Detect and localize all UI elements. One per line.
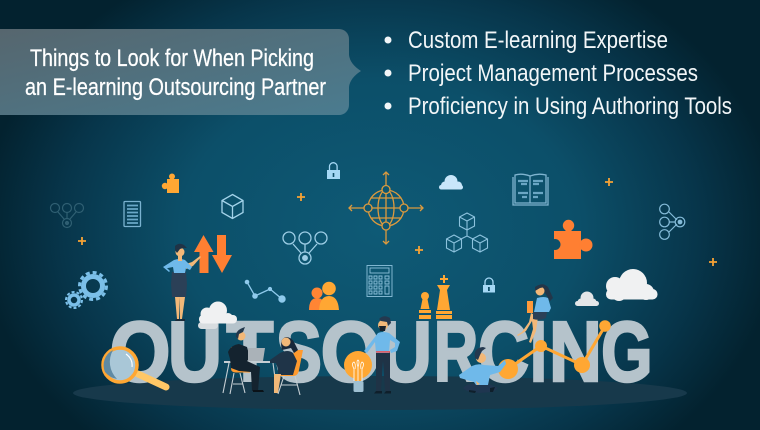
word: OUTSOURCING: T [226,305,274,400]
icon: globe [349,172,423,244]
icon: three linked cubes [446,213,488,252]
word: OUTSOURCING: R [434,305,478,400]
decorative plus marks [78,178,717,266]
title text: an E-learning Outsourcing Partner [25,74,326,101]
word: OUTSOURCING: N [549,305,602,400]
word: OUTSOURCING: C [478,305,529,400]
figure: woman sitting on the letters [517,284,553,343]
icon: dot chart [245,280,285,302]
icon: small puzzle piece [162,174,179,193]
bullet list [384,27,732,120]
word: OUTSOURCING: U [380,305,432,400]
figure: standing man [364,316,400,394]
word: OUTSOURCING: U [168,305,222,400]
icon: large puzzle piece [550,220,592,259]
icon: lock [327,163,340,179]
ground ellipse [73,376,687,410]
icon: small blue cloud [439,175,463,190]
word: OUTSOURCING: G [601,305,653,400]
right person [281,337,298,353]
icon: large white cloud [606,269,658,301]
icon: chess pieces [419,275,452,319]
icon: people [309,282,339,310]
word: OUTSOURCING: I [530,305,547,400]
icon: cube [222,194,243,218]
title callout [0,29,361,115]
word: OUTSOURCING: O [321,305,382,400]
figure: seated man [459,347,506,393]
icon: cloud above the U [198,302,237,329]
word: OUTSOURCING: O [110,305,170,400]
icon: open book [513,174,548,205]
icon: dim network [50,204,84,228]
table and chairs [223,362,300,395]
arrows: up and down [194,235,232,273]
bullet list: Project Management Processes [408,60,698,87]
title text: Things to Look for When Picking [30,45,314,72]
chart: orange line graph [498,320,611,379]
figure: meeting at a table [223,327,303,395]
icon: second lock [483,278,495,292]
icon: calculator [367,266,392,296]
icon: magnifying glass [103,348,166,387]
left person [228,344,260,391]
figure: standing woman [163,244,201,321]
icon: gears [66,272,106,308]
word: OUTSOURCING: S [276,305,322,400]
icon: small white cloud [575,292,599,306]
icon: document [124,202,140,226]
icon: right network [660,204,685,239]
icon: light network [283,232,327,264]
title text [25,45,326,101]
laptop [248,348,265,361]
icon: light bulb [344,351,372,392]
bullet list: Custom E-learning Expertise [408,27,668,54]
